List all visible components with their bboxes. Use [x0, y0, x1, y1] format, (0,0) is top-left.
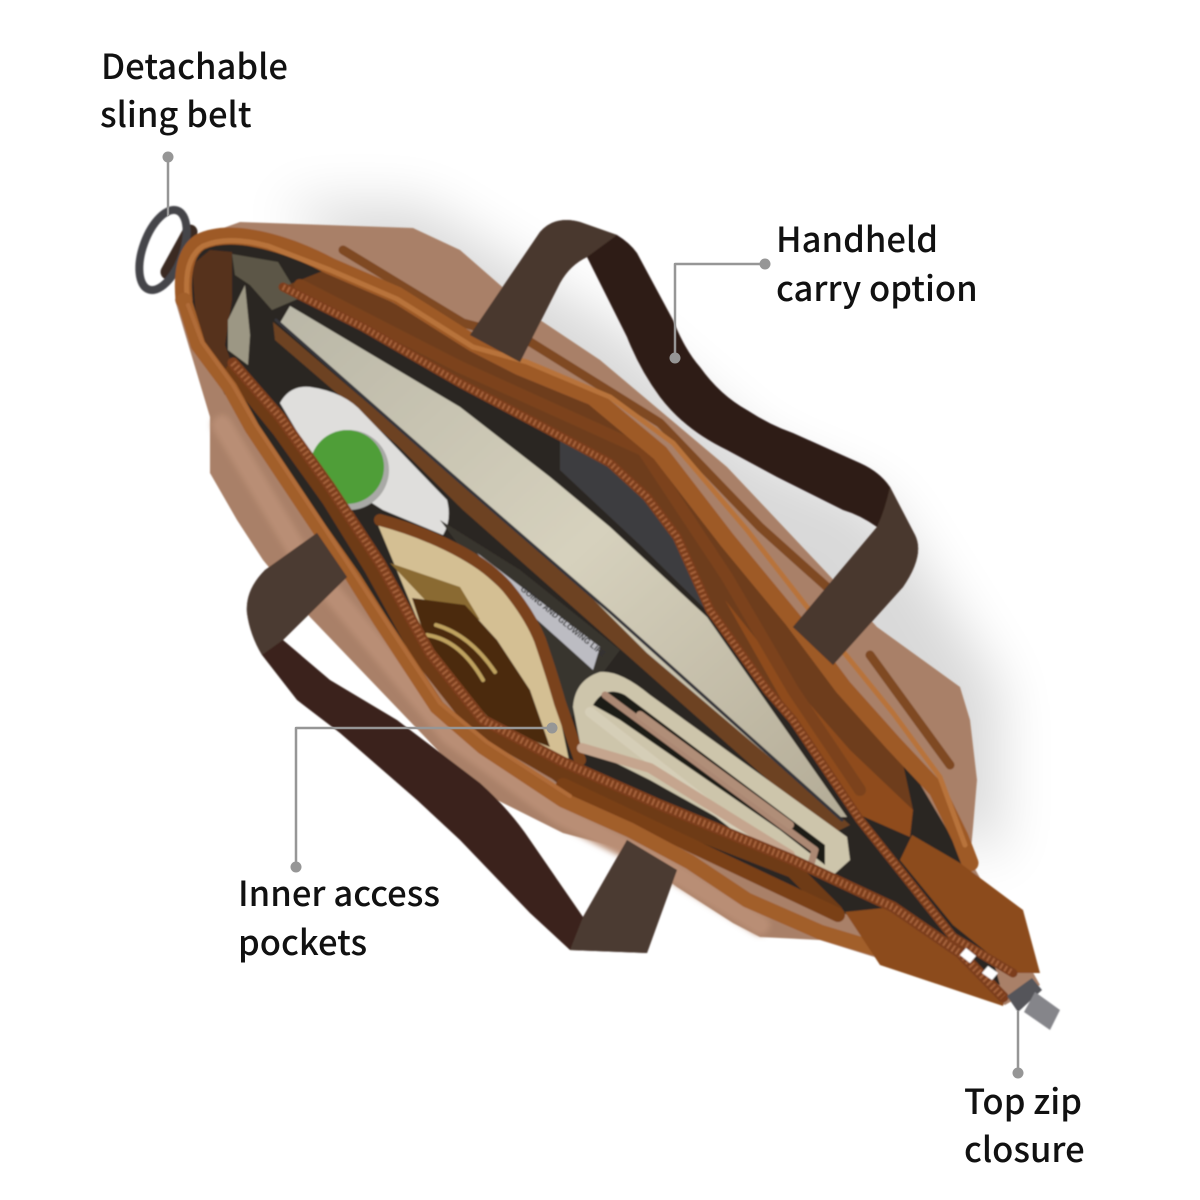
left rim: [184, 300, 873, 948]
handheld dot start: [670, 352, 680, 364]
front pocket strip: [233, 372, 835, 912]
wallet: [573, 672, 850, 878]
leather shading: [222, 425, 760, 925]
wallet outer: [573, 672, 850, 878]
gold disc: [427, 625, 495, 680]
interior: [186, 240, 1000, 985]
zipper tape upper: [900, 835, 1040, 973]
wallet inner slot: [593, 692, 825, 865]
tube text: GOING AND GLOWING LIFE: [519, 585, 608, 659]
grey tube: [477, 553, 600, 670]
grey lining: [560, 440, 708, 612]
front pocket band: [563, 785, 838, 915]
pockets dot start: [546, 722, 558, 734]
left inner leather: [192, 250, 238, 395]
handheld label: Handheld: [776, 212, 938, 262]
wallet flap: [590, 712, 795, 860]
pockets label: Inner access: [238, 866, 440, 916]
lower handle far end: [570, 840, 677, 953]
handheld label: carry option: [776, 261, 978, 311]
inner pocket lining: [378, 525, 570, 765]
pale lining: [228, 285, 250, 365]
zipper trim strip: [300, 285, 860, 790]
bag body: [175, 222, 1040, 1005]
metal ring: [130, 204, 196, 296]
callout: pockets: [238, 722, 558, 965]
cap face: [310, 430, 384, 504]
callout: sling belt: [100, 39, 288, 215]
zip label: Top zip: [964, 1074, 1082, 1124]
callout: zip: [964, 1012, 1085, 1172]
book: [280, 306, 847, 817]
zipper tape lower: [845, 907, 1005, 1006]
dark mid area: [440, 520, 620, 720]
sling belt label: Detachable: [101, 39, 288, 89]
zip dot: [1012, 1068, 1024, 1078]
book cover edge: [276, 320, 842, 820]
handheld dot end: [760, 258, 770, 270]
wallet fold: [605, 695, 815, 868]
upper handle near end: [470, 220, 617, 362]
tab: [1024, 992, 1060, 1030]
zipper gaps: [960, 948, 998, 980]
callout: handheld: [670, 212, 978, 364]
zip leader: [1017, 1012, 1019, 1073]
pockets dot end: [290, 862, 302, 872]
upper handle strap: [470, 220, 918, 665]
green cap: [309, 430, 389, 510]
handheld leader: [675, 264, 765, 358]
sling belt dot: [162, 152, 174, 162]
upper handle: [470, 220, 918, 665]
zipper front teeth: [233, 363, 1003, 997]
back rim: [183, 236, 970, 863]
back pocket brown panel: [725, 600, 913, 837]
pockets label: pockets: [238, 915, 367, 965]
sling belt leader: [167, 157, 169, 215]
wallet stripe: [640, 715, 790, 825]
zipper back: [283, 287, 1013, 973]
back pocket band: [283, 268, 913, 815]
cap ring: [309, 430, 389, 510]
zipper front: [233, 363, 1003, 997]
slider: [1007, 978, 1042, 1012]
zipper back teeth: [283, 287, 1013, 973]
inner pocket shade: [412, 598, 550, 747]
zip label: closure: [964, 1122, 1085, 1172]
wallet lower card: [582, 748, 790, 855]
left rim highlight: [188, 305, 570, 796]
olive lining: [232, 254, 300, 310]
lower handle: [247, 533, 677, 953]
back rim highlight: [187, 240, 965, 845]
pocket trim: [380, 520, 580, 760]
upper handle far end: [793, 487, 918, 665]
outer flap rim: [343, 250, 950, 765]
brown board: [273, 322, 850, 835]
inner pocket olive: [390, 563, 480, 620]
white bottle: [280, 387, 449, 535]
lower handle near end: [247, 533, 347, 655]
bag illustration: [130, 204, 1060, 1030]
lower handle strap: [247, 533, 677, 953]
sling belt label: sling belt: [100, 87, 252, 137]
pockets leader: [296, 728, 552, 867]
zipper pull: [1007, 978, 1060, 1030]
ring connector: [168, 232, 190, 272]
soft shadow: [280, 205, 1000, 860]
